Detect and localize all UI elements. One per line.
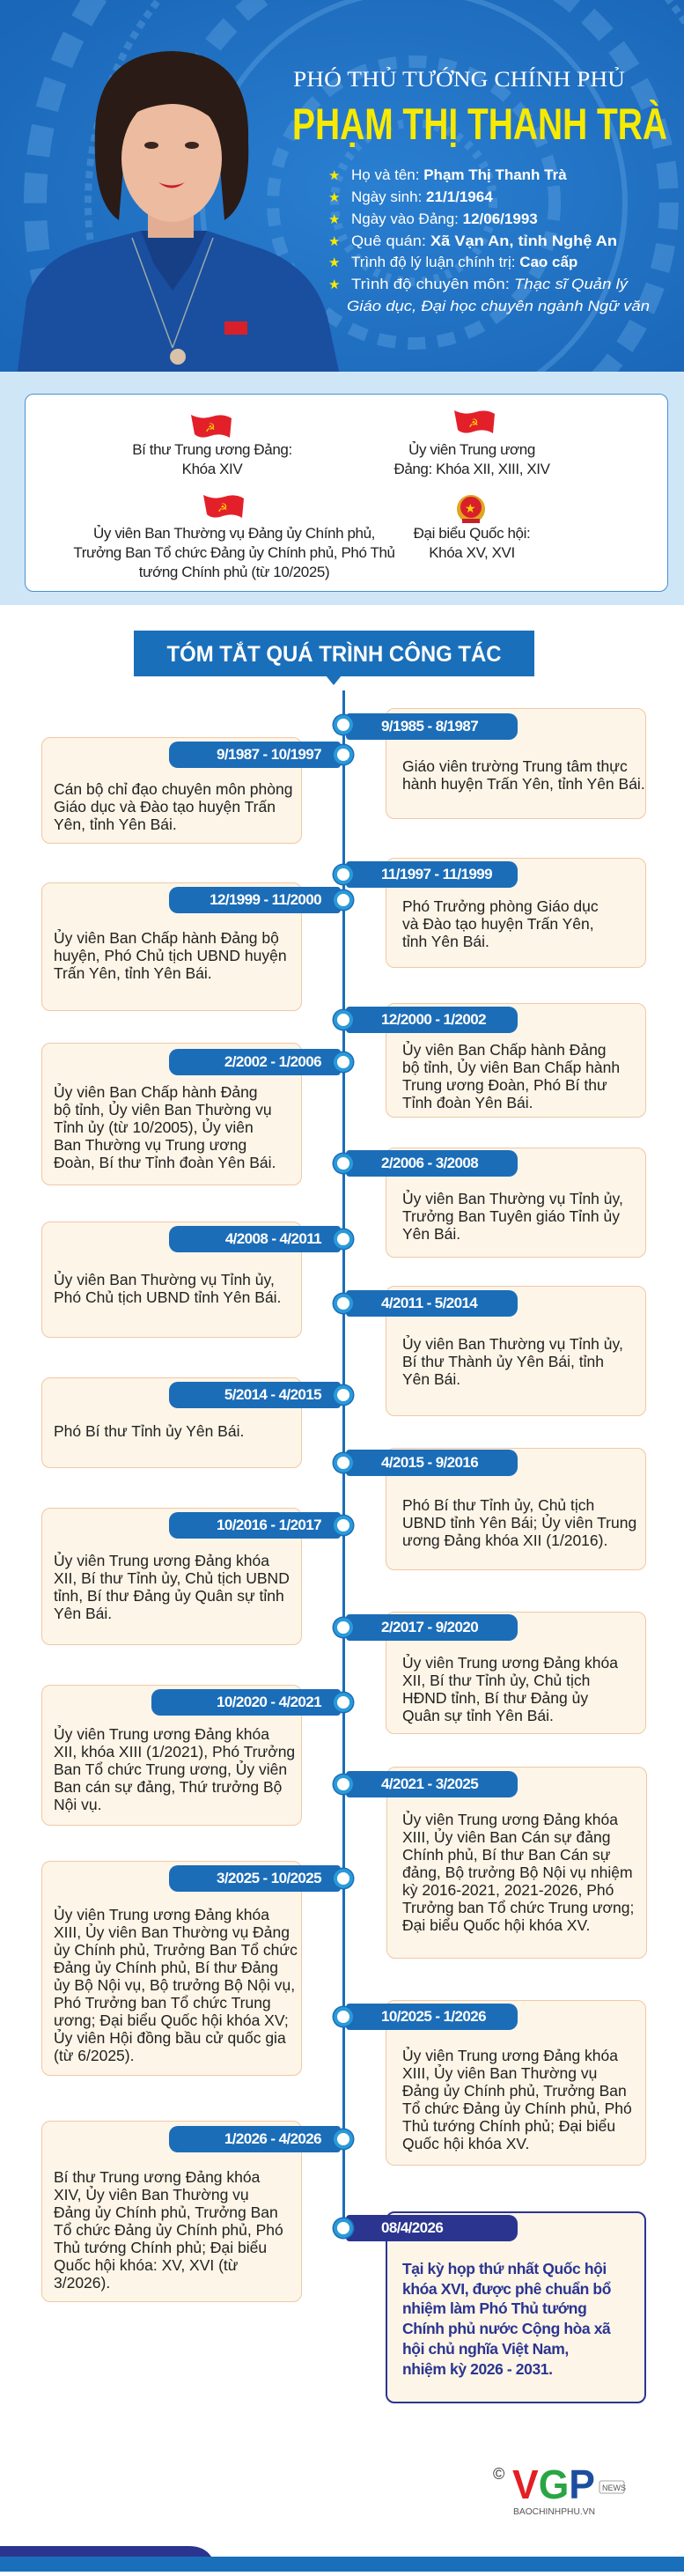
text: ủy Chính phủ, Trưởng Ban Tổ chức xyxy=(54,1941,298,1959)
entry R9 xyxy=(386,2000,646,2166)
text: Quân sự tỉnh Yên Bái. xyxy=(402,1707,554,1724)
text: Ban Thường vụ xyxy=(73,525,395,580)
text: Cán bộ chỉ đạo chuyên môn phòng xyxy=(54,780,292,798)
text: Ủy viên Ban Thường vụ Tỉnh ủy, xyxy=(402,1335,623,1353)
text: Chính phủ, Bí thư Ban Cán sự xyxy=(402,1846,610,1864)
text: Ủy viên Trung ương Đảng khóa xyxy=(402,1654,618,1672)
bio bullets: ★ xyxy=(328,168,340,183)
text: XII, khóa XIII (1/2021), Phó Trưởng xyxy=(54,1743,295,1760)
entry R5 xyxy=(386,1286,646,1416)
bio bullets: Họ và tên: Phạm Thị Thanh Trà xyxy=(351,166,567,183)
text: Quốc hội khóa XV. xyxy=(402,2135,529,2152)
bio bullets: Trình độ chuyên môn: Thạc sĩ Quản lý xyxy=(351,276,629,292)
text: Ủy viên TƯ: Ủy viên Trung ương xyxy=(408,441,535,458)
text: Đại biểu QH xyxy=(414,525,530,561)
entry L2 xyxy=(41,882,302,1011)
text: Thủ tướng Chính phủ; Đại biểu xyxy=(402,2117,615,2135)
text: Tại kỳ họp thứ nhất Quốc hội xyxy=(402,2260,607,2277)
text: hội chủ nghĩa Việt Nam, xyxy=(402,2340,569,2358)
bio bullets: Ngày vào Đảng: 12/06/1993 xyxy=(351,210,538,227)
entry R10 final xyxy=(386,2211,646,2403)
logo: VGP: VGP xyxy=(512,2462,595,2507)
text: Giáo viên trường Trung tâm thực xyxy=(402,757,628,775)
entry L9 xyxy=(41,2121,302,2302)
text: Ủy viên Trung ương Đảng khóa xyxy=(402,1811,618,1828)
entry L7 xyxy=(41,1685,302,1826)
text: Nội vụ. xyxy=(54,1796,101,1813)
icon: party flag 1: ☭ xyxy=(205,421,216,434)
text: 12/1999 - 11/2000 xyxy=(210,891,321,908)
header banner xyxy=(0,0,684,372)
text: Đại biểu QH: Khóa XV, XVI xyxy=(429,544,515,561)
text: 9/1985 - 8/1987 xyxy=(381,718,478,734)
text: Ủy viên Trung ương Đảng khóa xyxy=(54,1552,269,1569)
text: Ủy viên Trung ương Đảng khóa xyxy=(54,1906,269,1923)
text: Chính phủ nước Cộng hòa xã xyxy=(402,2320,610,2337)
text: Ban Thường vụ: Ủy viên Ban Thường vụ Đảng ủy Chính phủ, xyxy=(93,525,375,542)
text: Trung ương Đoàn, Phó Bí thư xyxy=(402,1076,607,1094)
text: XIII, Ủy viên Ban Thường vụ Đảng xyxy=(54,1923,290,1941)
text: Bí thư TƯ: Bí thư Trung ương Đảng: xyxy=(132,441,292,458)
text: 1/2026 - 4/2026 xyxy=(224,2130,321,2147)
text: Ủy viên Ban Thường vụ Tỉnh ủy, xyxy=(402,1190,623,1207)
text: tỉnh Yên Bái. xyxy=(402,933,489,950)
text: ương Đảng khóa XII (1/2016). xyxy=(402,1532,607,1549)
text: Tỉnh đoàn Yên Bái. xyxy=(402,1094,533,1111)
text: Ủy viên Hội đồng bầu cử quốc gia xyxy=(54,2029,286,2047)
text: 3/2025 - 10/2025 xyxy=(217,1870,321,1886)
text: Ủy viên Ban Chấp hành Đảng xyxy=(402,1041,607,1059)
text: Tỉnh ủy (từ 10/2005), Ủy viên xyxy=(54,1118,254,1136)
text: Đại biểu Quốc hội khóa XV. xyxy=(402,1916,590,1934)
text: 4/2015 - 9/2016 xyxy=(381,1454,478,1471)
bio bullets: ★ xyxy=(328,212,340,227)
icon: national emblem xyxy=(457,495,485,523)
icon: party flag 2: ☭ xyxy=(468,417,479,430)
text: tỉnh, Bí thư Đảng ủy Quân sự tỉnh xyxy=(54,1587,284,1605)
heading: timeline: TÓM TẮT QUÁ TRÌNH CÔNG TÁC xyxy=(167,640,502,667)
icon: national emblem: ★ xyxy=(465,501,476,515)
entry L6 xyxy=(41,1508,302,1645)
text: 10/2020 - 4/2021 xyxy=(217,1694,321,1710)
bio bullets: ★ xyxy=(328,190,340,205)
text: (từ 6/2025). xyxy=(54,2047,134,2064)
text: Yên, tỉnh Yên Bái. xyxy=(54,816,177,833)
text: Giáo dục và Đào tạo huyện Trấn xyxy=(54,798,276,816)
bio bullets: Ngày sinh: 21/1/1964 xyxy=(351,188,493,205)
text: Bí thư TƯ xyxy=(132,441,292,477)
entry R3 xyxy=(386,1003,646,1118)
text: 3/2026). xyxy=(54,2274,110,2292)
text: Bí thư Thành ủy Yên Bái, tỉnh xyxy=(402,1353,604,1370)
text: đảng, Bộ trưởng Bộ Nội vụ nhiệm xyxy=(402,1864,633,1881)
logo: VGP xyxy=(493,2462,626,2517)
text: Ủy viên TƯ: Đảng: Khóa XII, XIII, XIV xyxy=(393,461,550,477)
text: ương; Đại biểu Quốc hội khóa XV; xyxy=(54,2011,289,2029)
text: 4/2011 - 5/2014 xyxy=(381,1295,477,1311)
text: XIII, Ủy viên Ban Thường vụ xyxy=(402,2064,597,2082)
text: Thủ tướng Chính phủ; Đại biểu xyxy=(54,2239,267,2256)
text: 2/2017 - 9/2020 xyxy=(381,1619,478,1635)
bio bullets: Quê quán: Xã Vạn An, tỉnh Nghệ An xyxy=(351,233,617,249)
text: Trấn Yên, tỉnh Yên Bái. xyxy=(54,964,212,982)
entry R4 xyxy=(386,1148,646,1258)
logo: VGP: NEWS xyxy=(602,2484,626,2492)
entry R8 xyxy=(386,1767,647,1959)
text: Tổ chức Đảng ủy Chính phủ, Phó xyxy=(54,2221,283,2239)
entry R2 xyxy=(386,858,646,968)
text: Bí thư TƯ: Khóa XIV xyxy=(182,461,242,477)
text: Yên Bái. xyxy=(402,1225,460,1243)
text: Phó Trưởng phòng Giáo dục xyxy=(402,897,599,915)
icon: party flag 3 xyxy=(203,495,244,518)
text: Yên Bái. xyxy=(402,1370,460,1388)
bio bullets xyxy=(328,166,650,314)
text: Quốc hội khóa: XV, XVI (từ xyxy=(54,2256,239,2274)
bio bullets: ★ xyxy=(328,255,340,270)
entry R1 xyxy=(386,708,646,819)
title: PHÓ THỦ TƯỚNG CHÍNH PHỦ xyxy=(293,67,625,92)
text: XII, Bí thư Tỉnh ủy, Chủ tịch UBND xyxy=(54,1569,290,1587)
panel: positions summary xyxy=(25,394,668,592)
text: Trưởng Ban Tuyên giáo Tỉnh ủy xyxy=(402,1207,620,1225)
text: Phó Bí thư Tỉnh ủy, Chủ tịch xyxy=(402,1496,594,1514)
text: Trưởng ban Tổ chức Trung ương; xyxy=(402,1899,634,1916)
icon: party flag 3: ☭ xyxy=(217,501,228,514)
text: Ban Tổ chức Trung ương, Ủy viên xyxy=(54,1760,287,1778)
text: kỳ 2016-2021, 2021-2026, Phó xyxy=(402,1881,614,1899)
text: bộ tỉnh, Ủy viên Ban Chấp hành xyxy=(402,1059,620,1076)
icon: party flag 2 xyxy=(454,410,495,433)
text: nhiệm kỳ 2026 - 2031. xyxy=(402,2360,553,2378)
entry R7 xyxy=(386,1612,646,1734)
text: ủy Bộ Nội vụ, Bộ trưởng Bộ Nội vụ, xyxy=(54,1976,295,1994)
portrait xyxy=(18,51,339,372)
text: Đại biểu QH: Đại biểu Quốc hội: xyxy=(414,525,530,542)
text: Phó Chủ tịch UBND tỉnh Yên Bái. xyxy=(54,1288,281,1306)
entry L1 xyxy=(41,737,302,844)
text: 5/2014 - 4/2015 xyxy=(224,1386,321,1403)
text: Ban Thường vụ: tướng Chính phủ (từ 10/2025) xyxy=(139,564,329,580)
text: Đảng ủy Chính phủ, Bí thư Đảng xyxy=(54,1959,278,1976)
entry R6 xyxy=(386,1448,646,1570)
text: hành huyện Trấn Yên, tỉnh Yên Bái. xyxy=(402,775,645,793)
text: Đảng ủy Chính phủ, Trưởng Ban xyxy=(402,2082,627,2100)
text: 2/2006 - 3/2008 xyxy=(381,1155,478,1171)
logo: VGP: BAOCHINHPHU.VN xyxy=(513,2507,595,2517)
text: 08/4/2026 xyxy=(381,2219,443,2236)
text: Phó Bí thư Tỉnh ủy Yên Bái. xyxy=(54,1422,244,1440)
text: huyện, Phó Chủ tịch UBND huyện xyxy=(54,947,287,964)
text: XII, Bí thư Tỉnh ủy, Chủ tịch xyxy=(402,1672,590,1689)
text: XIII, Ủy viên Ban Cán sự đảng xyxy=(402,1828,610,1846)
icon: party flag 1 xyxy=(191,415,232,438)
light blue band xyxy=(0,372,684,605)
text: Đoàn, Bí thư Tỉnh đoàn Yên Bái. xyxy=(54,1154,276,1171)
text: Yên Bái. xyxy=(54,1605,112,1622)
text: Ủy viên Trung ương Đảng khóa xyxy=(54,1725,269,1743)
text: 4/2008 - 4/2011 xyxy=(225,1230,321,1247)
timeline line xyxy=(342,690,345,2228)
text: khóa XVI, được phê chuẩn bổ xyxy=(402,2280,611,2298)
text: Bí thư Trung ương Đảng khóa xyxy=(54,2168,260,2186)
bio bullets: Trình độ lý luận chính trị: Cao cấp xyxy=(351,254,577,270)
text: Ban Thường vụ Trung ương xyxy=(54,1136,246,1154)
heading: timeline xyxy=(134,631,534,685)
text: UBND tỉnh Yên Bái; Ủy viên Trung xyxy=(402,1514,636,1532)
text: 10/2025 - 1/2026 xyxy=(381,2008,486,2025)
text: 11/1997 - 11/1999 xyxy=(381,866,492,882)
text: Ủy viên Trung ương Đảng khóa xyxy=(402,2047,618,2064)
text: Ủy viên Ban Chấp hành Đảng bộ xyxy=(54,929,279,947)
text: Ban cán sự đảng, Thứ trưởng Bộ xyxy=(54,1778,282,1796)
text: Tổ chức Đảng ủy Chính phủ, Phó xyxy=(402,2100,632,2117)
text: và Đào tạo huyện Trấn Yên, xyxy=(402,915,594,933)
text: 4/2021 - 3/2025 xyxy=(381,1775,478,1792)
text: Đảng ủy Chính phủ, Trưởng Ban xyxy=(54,2203,278,2221)
logo: VGP: © xyxy=(493,2465,504,2483)
text: Phó Trưởng ban Tổ chức Trung xyxy=(54,1994,271,2011)
text: Ban Thường vụ: Trưởng Ban Tổ chức Đảng ủy Chính phủ, Phó Thủ xyxy=(73,544,395,561)
bio bullets: ★ xyxy=(328,234,340,249)
text: bộ tỉnh, Ủy viên Ban Thường vụ xyxy=(54,1101,272,1118)
text: HĐND tỉnh, Bí thư Đảng ủy xyxy=(402,1689,588,1707)
text: 10/2016 - 1/2017 xyxy=(217,1517,321,1533)
entry L3 xyxy=(41,1043,302,1185)
bottom bar xyxy=(0,2546,684,2572)
text: 12/2000 - 1/2002 xyxy=(381,1011,486,1028)
bio bullets: ★ xyxy=(328,277,340,292)
bio bullets: Giáo dục, Đại học chuyên ngành Ngữ văn xyxy=(347,298,650,314)
text: Ủy viên TƯ xyxy=(393,441,550,477)
text: Ủy viên Ban Thường vụ Tỉnh ủy, xyxy=(54,1271,275,1288)
text: nhiệm làm Phó Thủ tướng xyxy=(402,2299,586,2317)
entry L5 xyxy=(41,1377,302,1468)
text: Ủy viên Ban Chấp hành Đảng xyxy=(54,1083,258,1101)
text: 2/2002 - 1/2006 xyxy=(224,1053,321,1070)
entry L8 xyxy=(41,1861,302,2076)
text: XIV, Ủy viên Ban Thường vụ xyxy=(54,2186,249,2203)
entry L4 xyxy=(41,1222,302,1338)
text: 9/1987 - 10/1997 xyxy=(217,746,321,763)
